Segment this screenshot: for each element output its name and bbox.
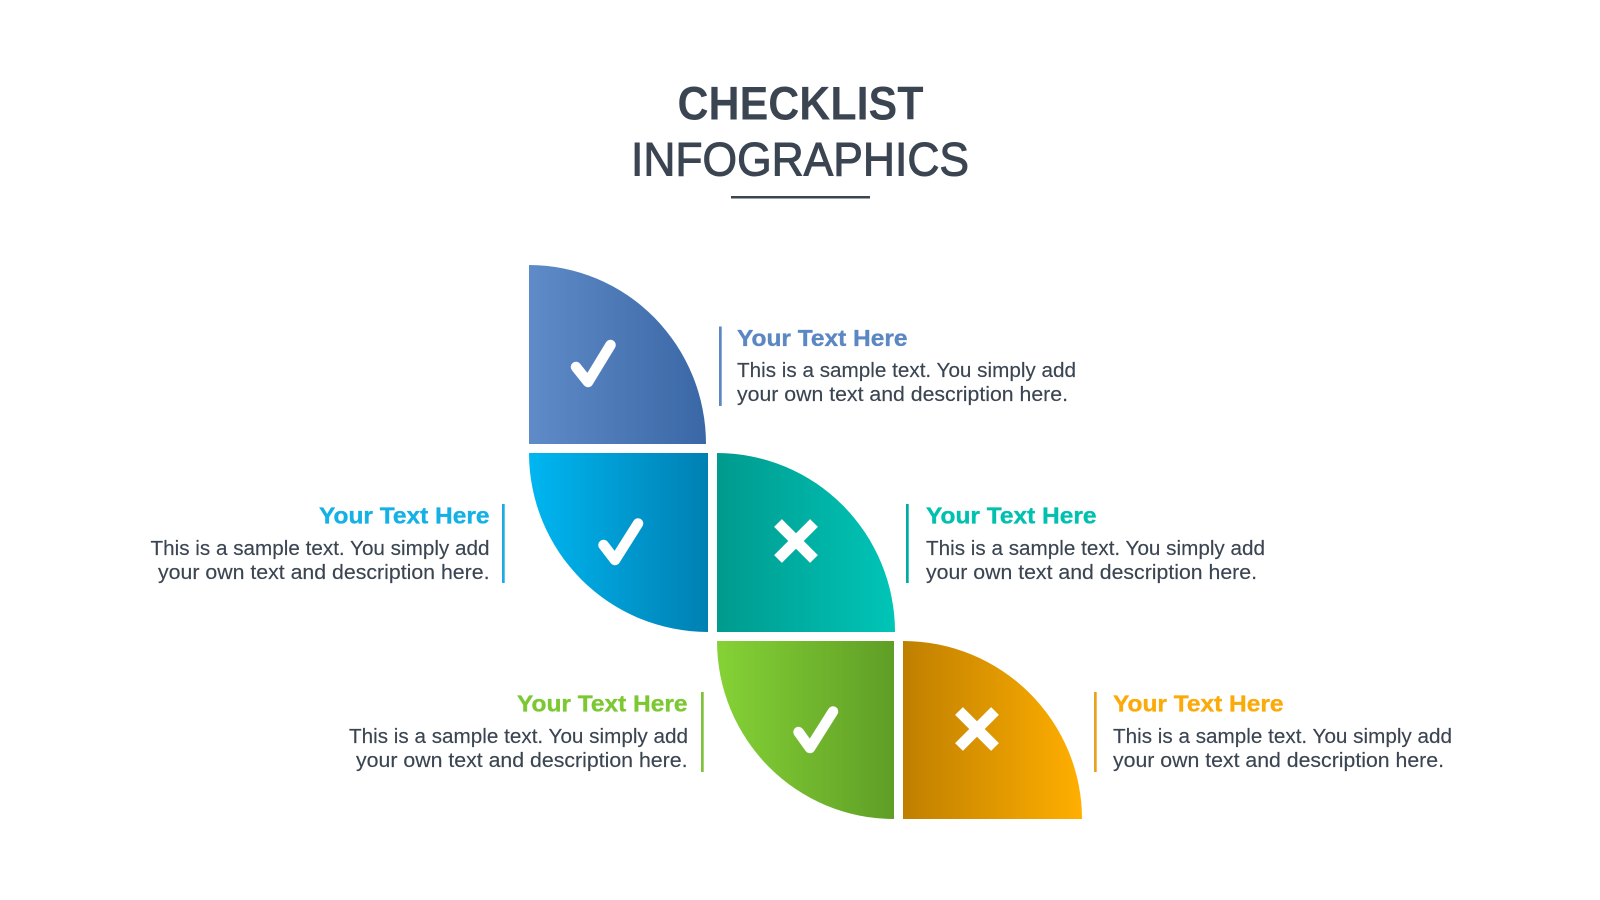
accent bar [701, 692, 704, 772]
heading: Your Text Here [517, 690, 688, 716]
heading: Your Text Here [319, 502, 490, 528]
accent bar [502, 504, 505, 583]
accent bar [1094, 692, 1097, 772]
quarter shape: cyan [529, 453, 708, 632]
text block [150, 502, 490, 584]
description line 2: your own text and description here. [926, 561, 1257, 584]
quarter shape: teal [717, 453, 895, 632]
icon: check mark [576, 345, 610, 382]
heading: Your Text Here [737, 325, 908, 351]
panel: item 1 blue [529, 265, 1076, 444]
heading: Your Text Here [1113, 690, 1284, 716]
icon: cross [959, 711, 995, 747]
panel: item 4 green [349, 641, 894, 819]
quarter shape: green [717, 641, 894, 819]
panel: item 3 teal [717, 453, 1265, 632]
description line 2: your own text and description here. [737, 383, 1068, 406]
description line 2: your own text and description here. [1113, 749, 1444, 772]
text block [349, 690, 688, 772]
description: This is a sample text. You simply add [150, 537, 490, 560]
description: This is a sample text. You simply add [1113, 725, 1452, 748]
title line: CHECKLIST: CHECKLIST [678, 78, 924, 130]
accent bar [719, 326, 722, 406]
text block [926, 502, 1265, 584]
quarter shape: orange [903, 641, 1082, 819]
description line 2: your own text and description here. [158, 561, 490, 584]
description: This is a sample text. You simply add [737, 359, 1076, 382]
description: This is a sample text. You simply add [349, 725, 688, 748]
text block [737, 325, 1076, 406]
heading: Your Text Here [926, 502, 1096, 528]
icon: check mark [604, 524, 638, 560]
panel: item 2 cyan [150, 453, 708, 632]
icon: check mark [798, 712, 833, 748]
panel: item 5 orange [903, 641, 1452, 819]
description: This is a sample text. You simply add [926, 537, 1265, 560]
icon: cross [778, 523, 814, 559]
description line 2: your own text and description here. [356, 749, 688, 772]
title [631, 78, 969, 198]
accent bar [906, 504, 909, 583]
title underline [731, 196, 870, 198]
title line: INFOGRAPHICS: INFOGRAPHICS [631, 134, 969, 186]
quarter shape: blue [529, 265, 706, 444]
text block [1113, 690, 1452, 772]
